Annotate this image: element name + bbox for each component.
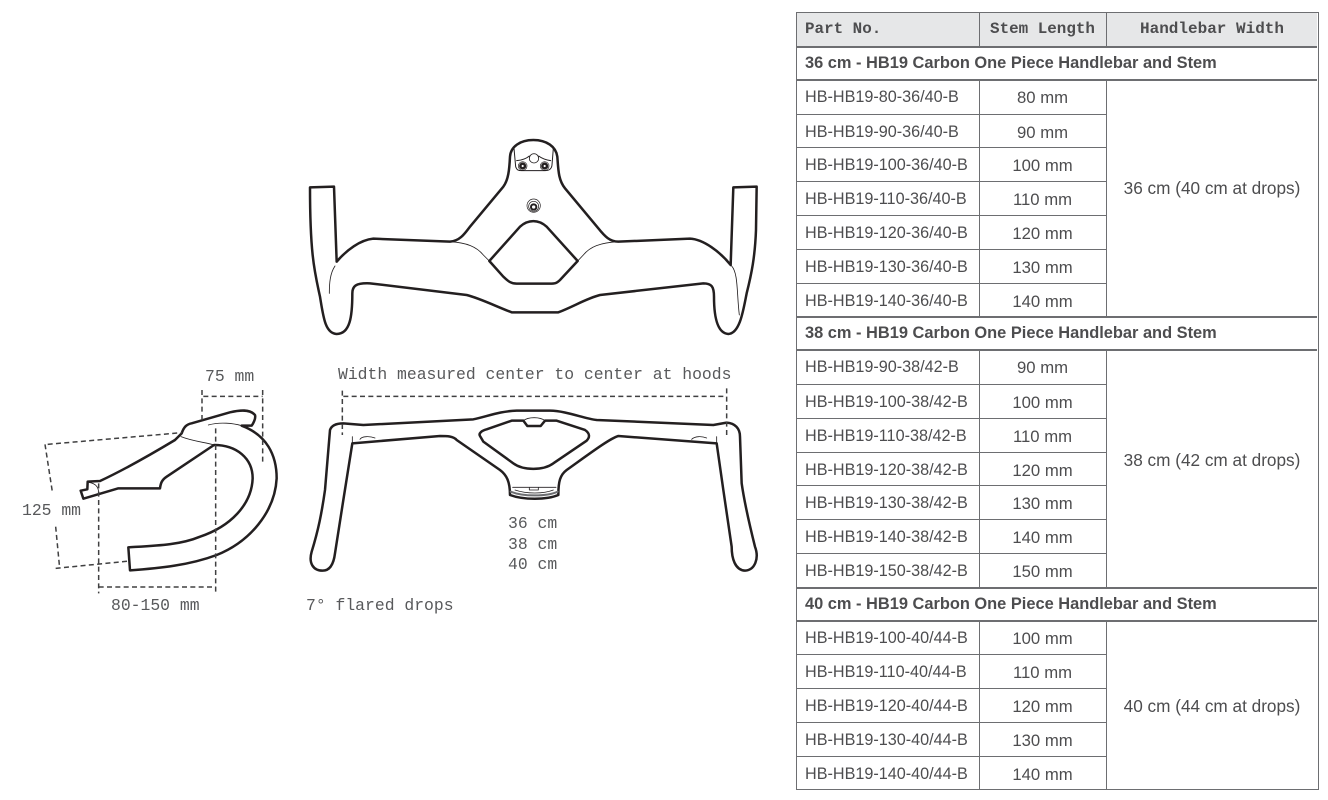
row: HB-HB19-90-38/42-B <box>805 351 1107 384</box>
label: 38 cm: 38 cm <box>508 535 557 554</box>
front view of handlebar from above <box>310 140 757 334</box>
row: HB-HB19-140-38/42-B: HB-HB19-140-38/42-B <box>805 528 968 546</box>
row: HB-HB19-100-38/42-B: HB-HB19-100-38/42-B <box>805 393 968 411</box>
row: HB-HB19-120-36/40-B: 120 mm <box>1012 224 1073 243</box>
table header: Part No. <box>805 20 881 38</box>
row: HB-HB19-140-40/44-B: 140 mm <box>1012 765 1073 784</box>
row: HB-HB19-120-38/42-B <box>797 452 1107 485</box>
section heading: 38 cm: 38 cm - HB19 Carbon One Piece Handlebar and Stem <box>805 324 1217 342</box>
row: HB-HB19-120-36/40-B: HB-HB19-120-36/40-B <box>805 224 968 242</box>
label: 125 mm: 125 mm <box>22 501 81 520</box>
row: HB-HB19-110-38/42-B: HB-HB19-110-38/42-B <box>805 427 967 445</box>
front view of handlebar with width dimension <box>311 388 757 571</box>
row: HB-HB19-100-38/42-B <box>797 384 1107 418</box>
row: HB-HB19-110-36/40-B: HB-HB19-110-36/40-B <box>805 190 967 208</box>
row: HB-HB19-90-36/40-B <box>797 114 1107 147</box>
merged width cell: 40 cm: 40 cm (44 cm at drops) <box>1124 696 1300 716</box>
label: 75 mm: 75 mm <box>205 367 254 386</box>
row: HB-HB19-120-38/42-B: HB-HB19-120-38/42-B <box>805 461 968 479</box>
row: HB-HB19-140-40/44-B <box>797 756 1107 790</box>
merged width cell: 36 cm: 36 cm (40 cm at drops) <box>1124 178 1300 198</box>
row: HB-HB19-100-36/40-B: 100 mm <box>1012 156 1073 175</box>
row: HB-HB19-110-38/42-B <box>797 418 1107 452</box>
row: HB-HB19-100-38/42-B: 100 mm <box>1012 393 1073 412</box>
row: HB-HB19-110-38/42-B: 110 mm <box>1013 427 1072 446</box>
row: HB-HB19-90-36/40-B: 90 mm <box>1017 123 1068 142</box>
row: HB-HB19-140-36/40-B <box>797 283 1107 316</box>
row: HB-HB19-150-38/42-B: HB-HB19-150-38/42-B <box>805 562 968 580</box>
side profile of handlebar with dimensions <box>45 390 277 593</box>
label: 36 cm: 36 cm <box>508 514 557 533</box>
section heading: 38 cm <box>797 316 1317 351</box>
row: HB-HB19-80-36/40-B <box>805 81 1107 114</box>
row: HB-HB19-80-36/40-B: 80 mm <box>1017 88 1068 107</box>
row: HB-HB19-90-38/42-B: HB-HB19-90-38/42-B <box>805 358 959 376</box>
row: HB-HB19-130-36/40-B <box>797 249 1107 283</box>
row: HB-HB19-130-38/42-B <box>797 485 1107 519</box>
label: flared drops: 7° flared drops <box>306 596 454 615</box>
row: HB-HB19-150-38/42-B: 150 mm <box>1012 562 1073 581</box>
row: HB-HB19-100-36/40-B <box>797 147 1107 181</box>
row: HB-HB19-110-36/40-B: 110 mm <box>1013 190 1072 209</box>
row: HB-HB19-130-40/44-B <box>797 722 1107 756</box>
table header <box>797 13 1317 47</box>
row: HB-HB19-130-36/40-B: 130 mm <box>1012 258 1073 277</box>
table header: Stem Length <box>990 20 1095 38</box>
row: HB-HB19-110-36/40-B <box>797 181 1107 215</box>
row: HB-HB19-100-40/44-B <box>805 622 1107 654</box>
row: HB-HB19-140-38/42-B <box>797 519 1107 553</box>
row: HB-HB19-90-36/40-B: HB-HB19-90-36/40-B <box>805 123 959 141</box>
row: HB-HB19-130-38/42-B: 130 mm <box>1012 494 1073 513</box>
row: HB-HB19-100-36/40-B: HB-HB19-100-36/40-B <box>805 156 968 174</box>
row: HB-HB19-80-36/40-B: HB-HB19-80-36/40-B <box>805 88 959 106</box>
row: HB-HB19-120-40/44-B: 120 mm <box>1012 697 1073 716</box>
row: HB-HB19-100-40/44-B: 100 mm <box>1012 629 1073 648</box>
row: HB-HB19-120-40/44-B: HB-HB19-120-40/44-B <box>805 697 968 715</box>
label: width measured: Width measured center to center at hoods <box>338 365 731 384</box>
row: HB-HB19-150-38/42-B <box>797 553 1107 587</box>
section heading: 40 cm <box>797 587 1317 622</box>
row: HB-HB19-140-36/40-B: HB-HB19-140-36/40-B <box>805 292 968 310</box>
row: HB-HB19-90-38/42-B: 90 mm <box>1017 358 1068 377</box>
row: HB-HB19-100-40/44-B: HB-HB19-100-40/44-B <box>805 629 968 647</box>
row: HB-HB19-140-40/44-B: HB-HB19-140-40/44-B <box>805 765 968 783</box>
row: HB-HB19-120-38/42-B: 120 mm <box>1012 461 1073 480</box>
table: part numbers <box>796 12 1319 790</box>
row: HB-HB19-130-38/42-B: HB-HB19-130-38/42-B <box>805 494 968 512</box>
row: HB-HB19-140-38/42-B: 140 mm <box>1012 528 1073 547</box>
row: HB-HB19-120-36/40-B <box>797 215 1107 249</box>
label: 80-150 mm: 80-150 mm <box>111 596 200 615</box>
section heading: 36 cm <box>797 46 1317 81</box>
row: HB-HB19-130-40/44-B: HB-HB19-130-40/44-B <box>805 731 968 749</box>
row: HB-HB19-110-40/44-B: 110 mm <box>1013 663 1072 682</box>
row: HB-HB19-130-36/40-B: HB-HB19-130-36/40-B <box>805 258 968 276</box>
section heading: 36 cm: 36 cm - HB19 Carbon One Piece Handlebar and Stem <box>805 54 1217 72</box>
row: HB-HB19-120-40/44-B <box>797 688 1107 722</box>
section heading: 40 cm: 40 cm - HB19 Carbon One Piece Handlebar and Stem <box>805 595 1217 613</box>
merged width cell: 38 cm: 38 cm (42 cm at drops) <box>1124 450 1300 470</box>
label: 40 cm: 40 cm <box>508 555 557 574</box>
row: HB-HB19-110-40/44-B: HB-HB19-110-40/44-B <box>805 663 967 681</box>
row: HB-HB19-130-40/44-B: 130 mm <box>1012 731 1073 750</box>
row: HB-HB19-110-40/44-B <box>797 654 1107 688</box>
row: HB-HB19-140-36/40-B: 140 mm <box>1012 292 1073 311</box>
table header: Handlebar Width <box>1140 20 1284 38</box>
